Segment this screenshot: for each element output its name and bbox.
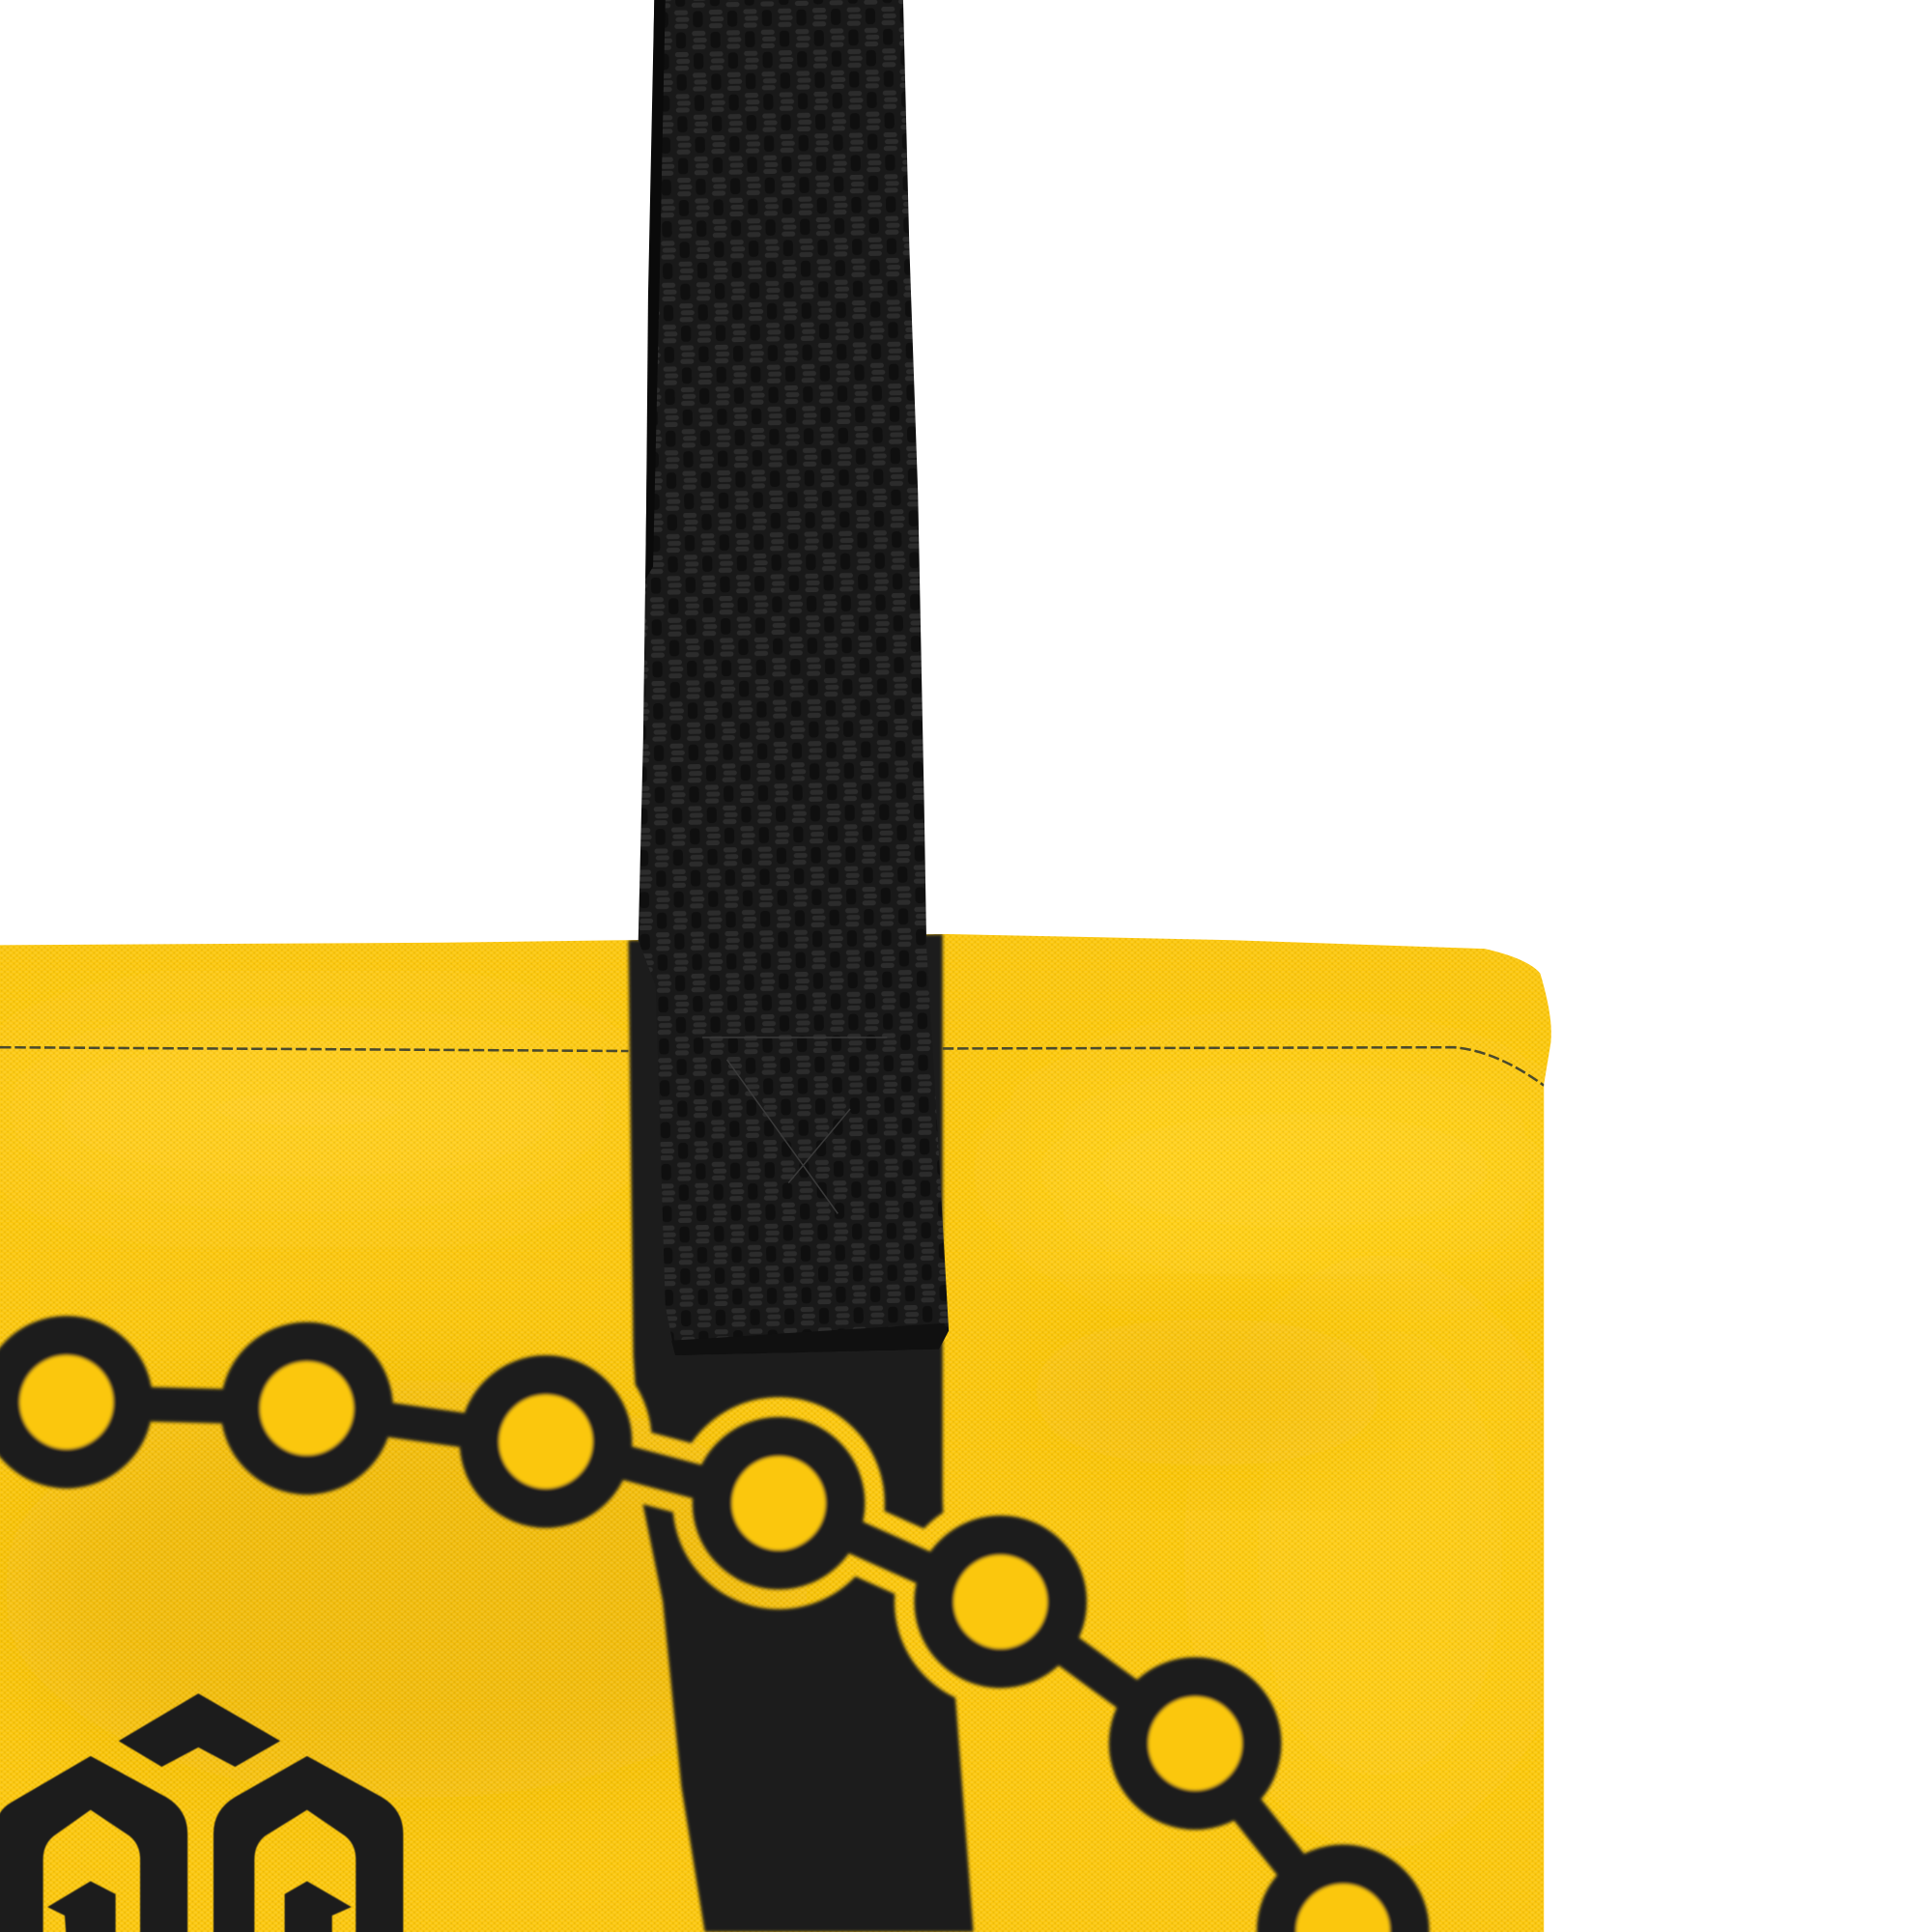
printed black band (629, 934, 974, 1932)
strap: black woven webbing (639, 0, 949, 1355)
bag body: yellow canvas (0, 924, 1602, 1932)
stitching (0, 1047, 1544, 1086)
printed emblem: chevron and twin arches (0, 1693, 403, 1932)
printed chain of rings (0, 1336, 1409, 1932)
